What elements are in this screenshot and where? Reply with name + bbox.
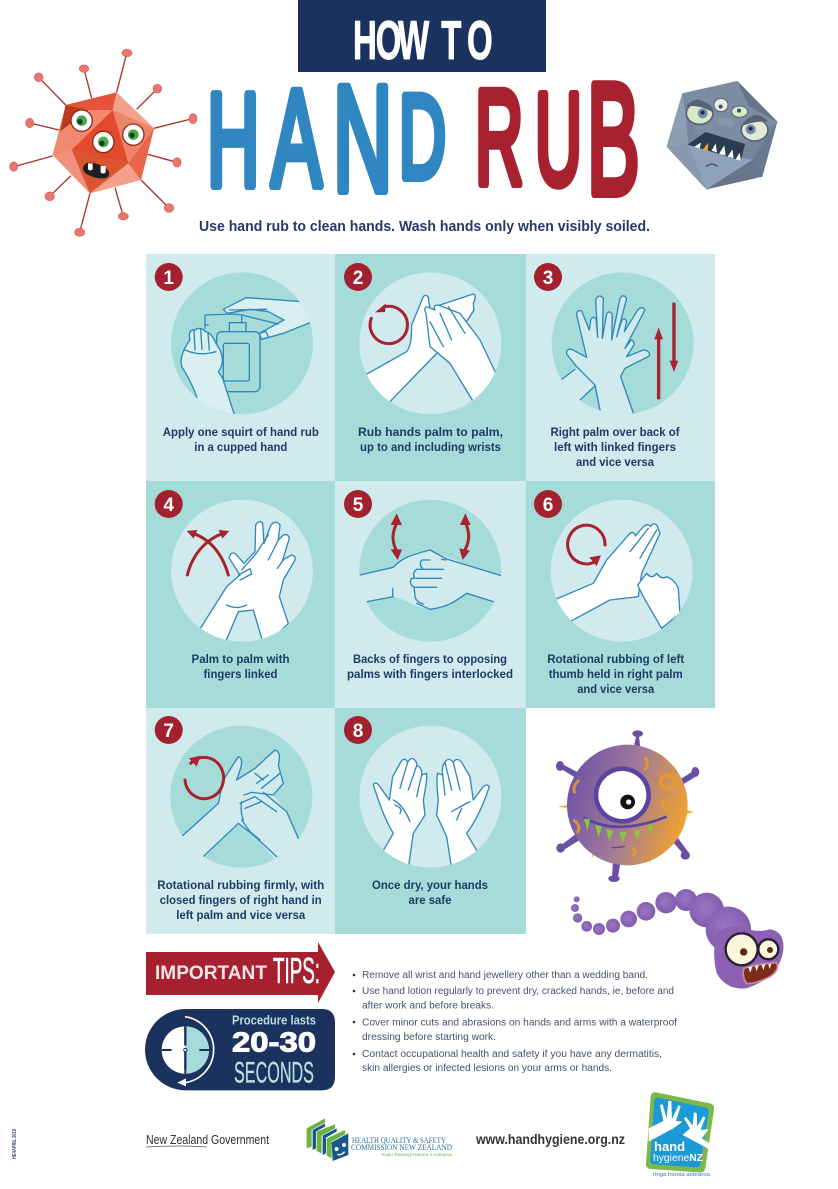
logo: Hand Hygiene NZ: ringa horoia aotearoa xyxy=(653,1172,711,1178)
tips bullet list: after work and before breaks. xyxy=(362,1000,494,1012)
panel: step 3 xyxy=(526,254,715,481)
caption: are safe xyxy=(408,893,452,907)
panel: step 7 xyxy=(146,708,335,934)
main title: hand rub: R xyxy=(475,63,523,213)
procedure timer badge: Procedure lasts xyxy=(232,1012,316,1027)
step number 2 xyxy=(344,263,372,291)
caption: thumb held in right palm xyxy=(549,667,683,681)
main title: hand rub: N xyxy=(333,54,393,223)
important tips arrow banner: IMPORTANT xyxy=(155,963,267,984)
main title: hand rub: D xyxy=(399,72,446,204)
caption: Apply one squirt of hand rub xyxy=(163,425,319,439)
procedure timer badge xyxy=(145,1009,335,1090)
step number 6: 6 xyxy=(543,495,553,516)
step number 3 xyxy=(534,263,562,291)
step number 5 xyxy=(344,490,372,518)
caption xyxy=(163,425,319,454)
caption xyxy=(547,652,684,696)
step number 8 xyxy=(344,716,372,744)
step number 4 xyxy=(155,490,183,518)
tips bullet list xyxy=(353,970,677,1074)
panel: step 8 xyxy=(335,708,526,934)
icon: red virus character xyxy=(10,49,197,236)
tips bullet list: dressing before starting work. xyxy=(362,1032,496,1043)
step number 7: 7 xyxy=(163,721,174,742)
logo: New Zealand Government: New Zealand Government xyxy=(146,1132,269,1147)
illustration: linked fingers xyxy=(547,272,694,415)
caption: Rotational rubbing of left xyxy=(547,652,684,666)
tips bullet list: Cover minor cuts and abrasions on hands and arms with a waterproof xyxy=(362,1018,677,1028)
step number 8: 8 xyxy=(353,721,363,742)
caption: left palm and vice versa xyxy=(176,908,306,922)
caption: palms with fingers interlocked xyxy=(347,667,513,681)
logo: Health Quality and Safety Commission: Kupu Taurangi Hauora o Aotearoa xyxy=(382,1152,453,1157)
caption: and vice versa xyxy=(576,455,654,469)
tips bullet list: skin allergies or infected lesions on your arms or hands. xyxy=(362,1063,612,1074)
main title: hand rub: U xyxy=(535,66,582,212)
tips bullet list: Use hand lotion regularly to prevent dry, cracked hands, ie, before and xyxy=(362,986,674,997)
logo: Health Quality and Safety Commission: HEALTH QUALITY & SAFETY xyxy=(352,1136,446,1145)
logo: Hand Hygiene NZ: hand xyxy=(654,1139,685,1154)
icon: purple virus character xyxy=(556,730,699,882)
logo: Health Quality and Safety Commission: COMMISSION NEW ZEALAND xyxy=(351,1143,452,1152)
icon: clock xyxy=(162,1017,214,1086)
icon: purple worm character xyxy=(571,889,783,989)
step number 7 xyxy=(155,716,183,744)
step number 3: 3 xyxy=(543,268,553,289)
main title: hand rub: B xyxy=(587,52,640,228)
step number 5: 5 xyxy=(353,495,364,516)
title band: how to xyxy=(298,0,546,72)
caption: fingers linked xyxy=(204,667,278,681)
illustration: dispenser and cupped hand xyxy=(171,272,317,417)
subtitle: Use hand rub to clean hands. Wash hands only when visibly soiled. xyxy=(199,218,650,235)
caption: up to and including wrists xyxy=(360,440,501,454)
title band: how to: HOW xyxy=(353,9,429,71)
panel: step 4 xyxy=(146,481,335,708)
caption xyxy=(192,652,290,681)
illustration: open dry hands xyxy=(359,726,501,868)
important tips arrow banner xyxy=(146,942,335,1003)
illustration: palm to palm xyxy=(359,272,501,414)
panel: step 6 xyxy=(526,481,715,708)
panel: step 2 xyxy=(335,254,526,481)
procedure timer badge: 20-30 xyxy=(232,1027,316,1058)
step number 1 xyxy=(155,263,183,291)
procedure timer badge: SECONDS xyxy=(234,1056,314,1089)
caption: Rub hands palm to palm, xyxy=(358,425,503,439)
caption: Right palm over back of xyxy=(550,425,680,439)
caption: and vice versa xyxy=(577,682,654,696)
caption: left with linked fingers xyxy=(554,440,676,454)
caption: in a cupped hand xyxy=(194,440,287,454)
caption xyxy=(157,878,324,922)
illustration: thumb rubbing xyxy=(550,500,693,642)
main title: hand rub: A xyxy=(271,63,322,215)
step number 6 xyxy=(534,490,562,518)
illustration: backs of fingers xyxy=(353,500,507,642)
caption xyxy=(372,878,488,907)
tips bullet list: Remove all wrist and hand jewellery other than a wedding band. xyxy=(362,970,648,981)
caption: Rotational rubbing firmly, with xyxy=(157,878,324,892)
caption: closed fingers of right hand in xyxy=(160,893,322,907)
step number 2: 2 xyxy=(353,268,363,289)
panel: step 5 xyxy=(335,481,526,708)
tips bullet list: Contact occupational health and safety if you have any dermatitis, xyxy=(362,1049,662,1060)
caption xyxy=(347,652,513,681)
illustration: fingers linked xyxy=(171,500,313,647)
step number 1: 1 xyxy=(163,268,174,289)
caption xyxy=(550,425,680,469)
icon: grey virus character xyxy=(667,81,777,189)
important tips arrow banner: TIPS: xyxy=(273,950,320,991)
caption: Backs of fingers to opposing xyxy=(353,652,507,666)
logo: Health Quality and Safety Commission xyxy=(307,1118,453,1161)
logo: Hand Hygiene NZ xyxy=(646,1092,714,1178)
caption: Palm to palm with xyxy=(192,652,290,666)
main title: hand rub: H xyxy=(207,67,259,214)
logo: Hand Hygiene NZ: hygieneNZ xyxy=(653,1152,704,1164)
main title: hand rub xyxy=(207,52,640,228)
caption xyxy=(358,425,503,454)
title band: how to: T xyxy=(441,9,462,71)
caption: Once dry, your hands xyxy=(372,878,488,892)
title band: how to: O xyxy=(467,9,493,71)
print code: HE4APRIL 2019 xyxy=(12,1129,18,1159)
website address: www.handhygiene.org.nz xyxy=(475,1132,625,1147)
step number 4: 4 xyxy=(163,495,174,516)
illustration: rotational rubbing of fingers xyxy=(170,726,312,868)
panel: step 1 xyxy=(146,254,335,481)
